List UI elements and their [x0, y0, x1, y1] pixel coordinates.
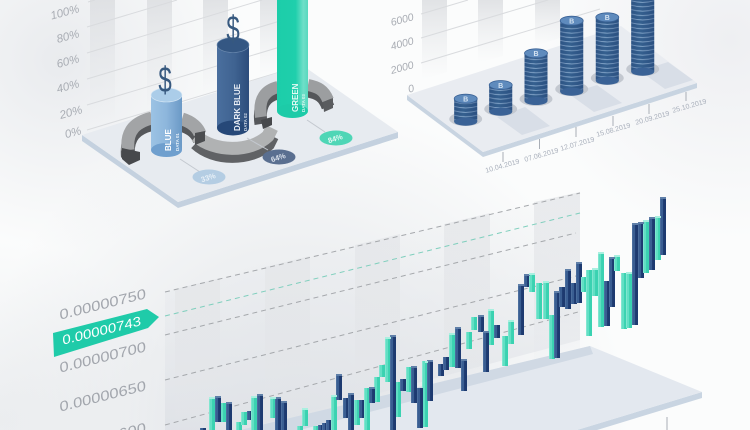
- axis labels: 60%: [55, 53, 81, 71]
- axis labels: 4000: [389, 35, 415, 53]
- cylinder: blue: [151, 88, 182, 157]
- date labels: 25.10.2019: [672, 98, 707, 115]
- axis labels: 0: [407, 83, 416, 96]
- stack 4: B: [569, 18, 574, 26]
- value pill: green: [320, 130, 352, 146]
- stack 1: [449, 94, 482, 126]
- axis labels: 6000: [389, 11, 415, 29]
- panel: coin stack chart: [388, 0, 707, 175]
- date labels: 12.07.2019: [560, 136, 595, 153]
- axis labels: [49, 3, 84, 141]
- panel: percentage chart: [49, 0, 398, 208]
- axis labels: 20%: [57, 104, 84, 122]
- price labels: 0.00000750: [59, 285, 147, 323]
- axis labels: 40%: [55, 78, 81, 96]
- chart wall shading: [165, 193, 580, 430]
- value pill: green: 84%: [327, 132, 344, 145]
- stack 2: B: [498, 83, 503, 90]
- stack 6: [626, 0, 659, 76]
- cylinder: blue: DATA 01: [175, 133, 180, 151]
- price labels: 0.00000650: [59, 377, 147, 415]
- stack 5: B: [605, 15, 610, 22]
- date labels: 07.06.2019: [524, 147, 559, 164]
- axis labels: 100%: [49, 3, 81, 23]
- date labels: [485, 98, 707, 175]
- value pill: dark blue: 64%: [270, 151, 287, 164]
- platform: [82, 65, 398, 208]
- leader lines: [180, 120, 325, 172]
- gridlines: [87, 0, 290, 130]
- price labels: 0.00000700: [59, 338, 147, 376]
- date labels: 15.08.2019: [596, 122, 631, 139]
- axis labels: 80%: [55, 28, 81, 46]
- chart wall bands: [90, 0, 285, 125]
- date labels: 10.04.2019: [485, 158, 520, 175]
- icon: blue dollar: $: [158, 60, 172, 100]
- stack 4: [555, 16, 588, 96]
- axis labels: 2000: [388, 59, 415, 77]
- stack 3: B: [533, 51, 539, 58]
- candlesticks: [200, 197, 666, 430]
- stack 1: B: [463, 96, 468, 104]
- panel: candlestick chart: [53, 192, 702, 430]
- S-shaped ribbon: [122, 85, 333, 165]
- chart wall bands: [422, 0, 560, 80]
- axis labels: [388, 11, 416, 96]
- cylinder: green: DATA 03: [301, 94, 306, 112]
- date ticks: [503, 92, 686, 162]
- current price tag: [53, 309, 159, 357]
- price labels: [59, 285, 147, 430]
- cylinder: blue: BLUE: [164, 129, 173, 151]
- stack 5: [591, 13, 624, 85]
- axis labels: 0%: [64, 125, 83, 141]
- cylinder: green: [277, 0, 308, 118]
- dashed guide lines: [165, 193, 580, 425]
- platform: [240, 346, 702, 430]
- cylinder: dark blue: DATA 02: [243, 113, 248, 131]
- platform: [407, 26, 697, 157]
- value pill: blue: [192, 170, 226, 184]
- date labels: 20.09.2019: [635, 110, 670, 127]
- cylinder: dark blue: [217, 38, 249, 136]
- icon: dark blue dollar: $: [226, 9, 240, 49]
- stack 2: [484, 80, 517, 116]
- stack 3: [520, 49, 552, 106]
- current price tag: 0.00000743: [62, 313, 142, 348]
- cylinder: dark blue: DARK BLUE: [233, 83, 242, 131]
- value pill: blue: 33%: [200, 171, 217, 184]
- value pill: dark blue: [262, 150, 296, 164]
- coin stacks: [449, 0, 659, 126]
- gridlines: [421, 0, 600, 63]
- cylinder: green: GREEN: [291, 83, 300, 112]
- chart wall bands: [175, 192, 580, 430]
